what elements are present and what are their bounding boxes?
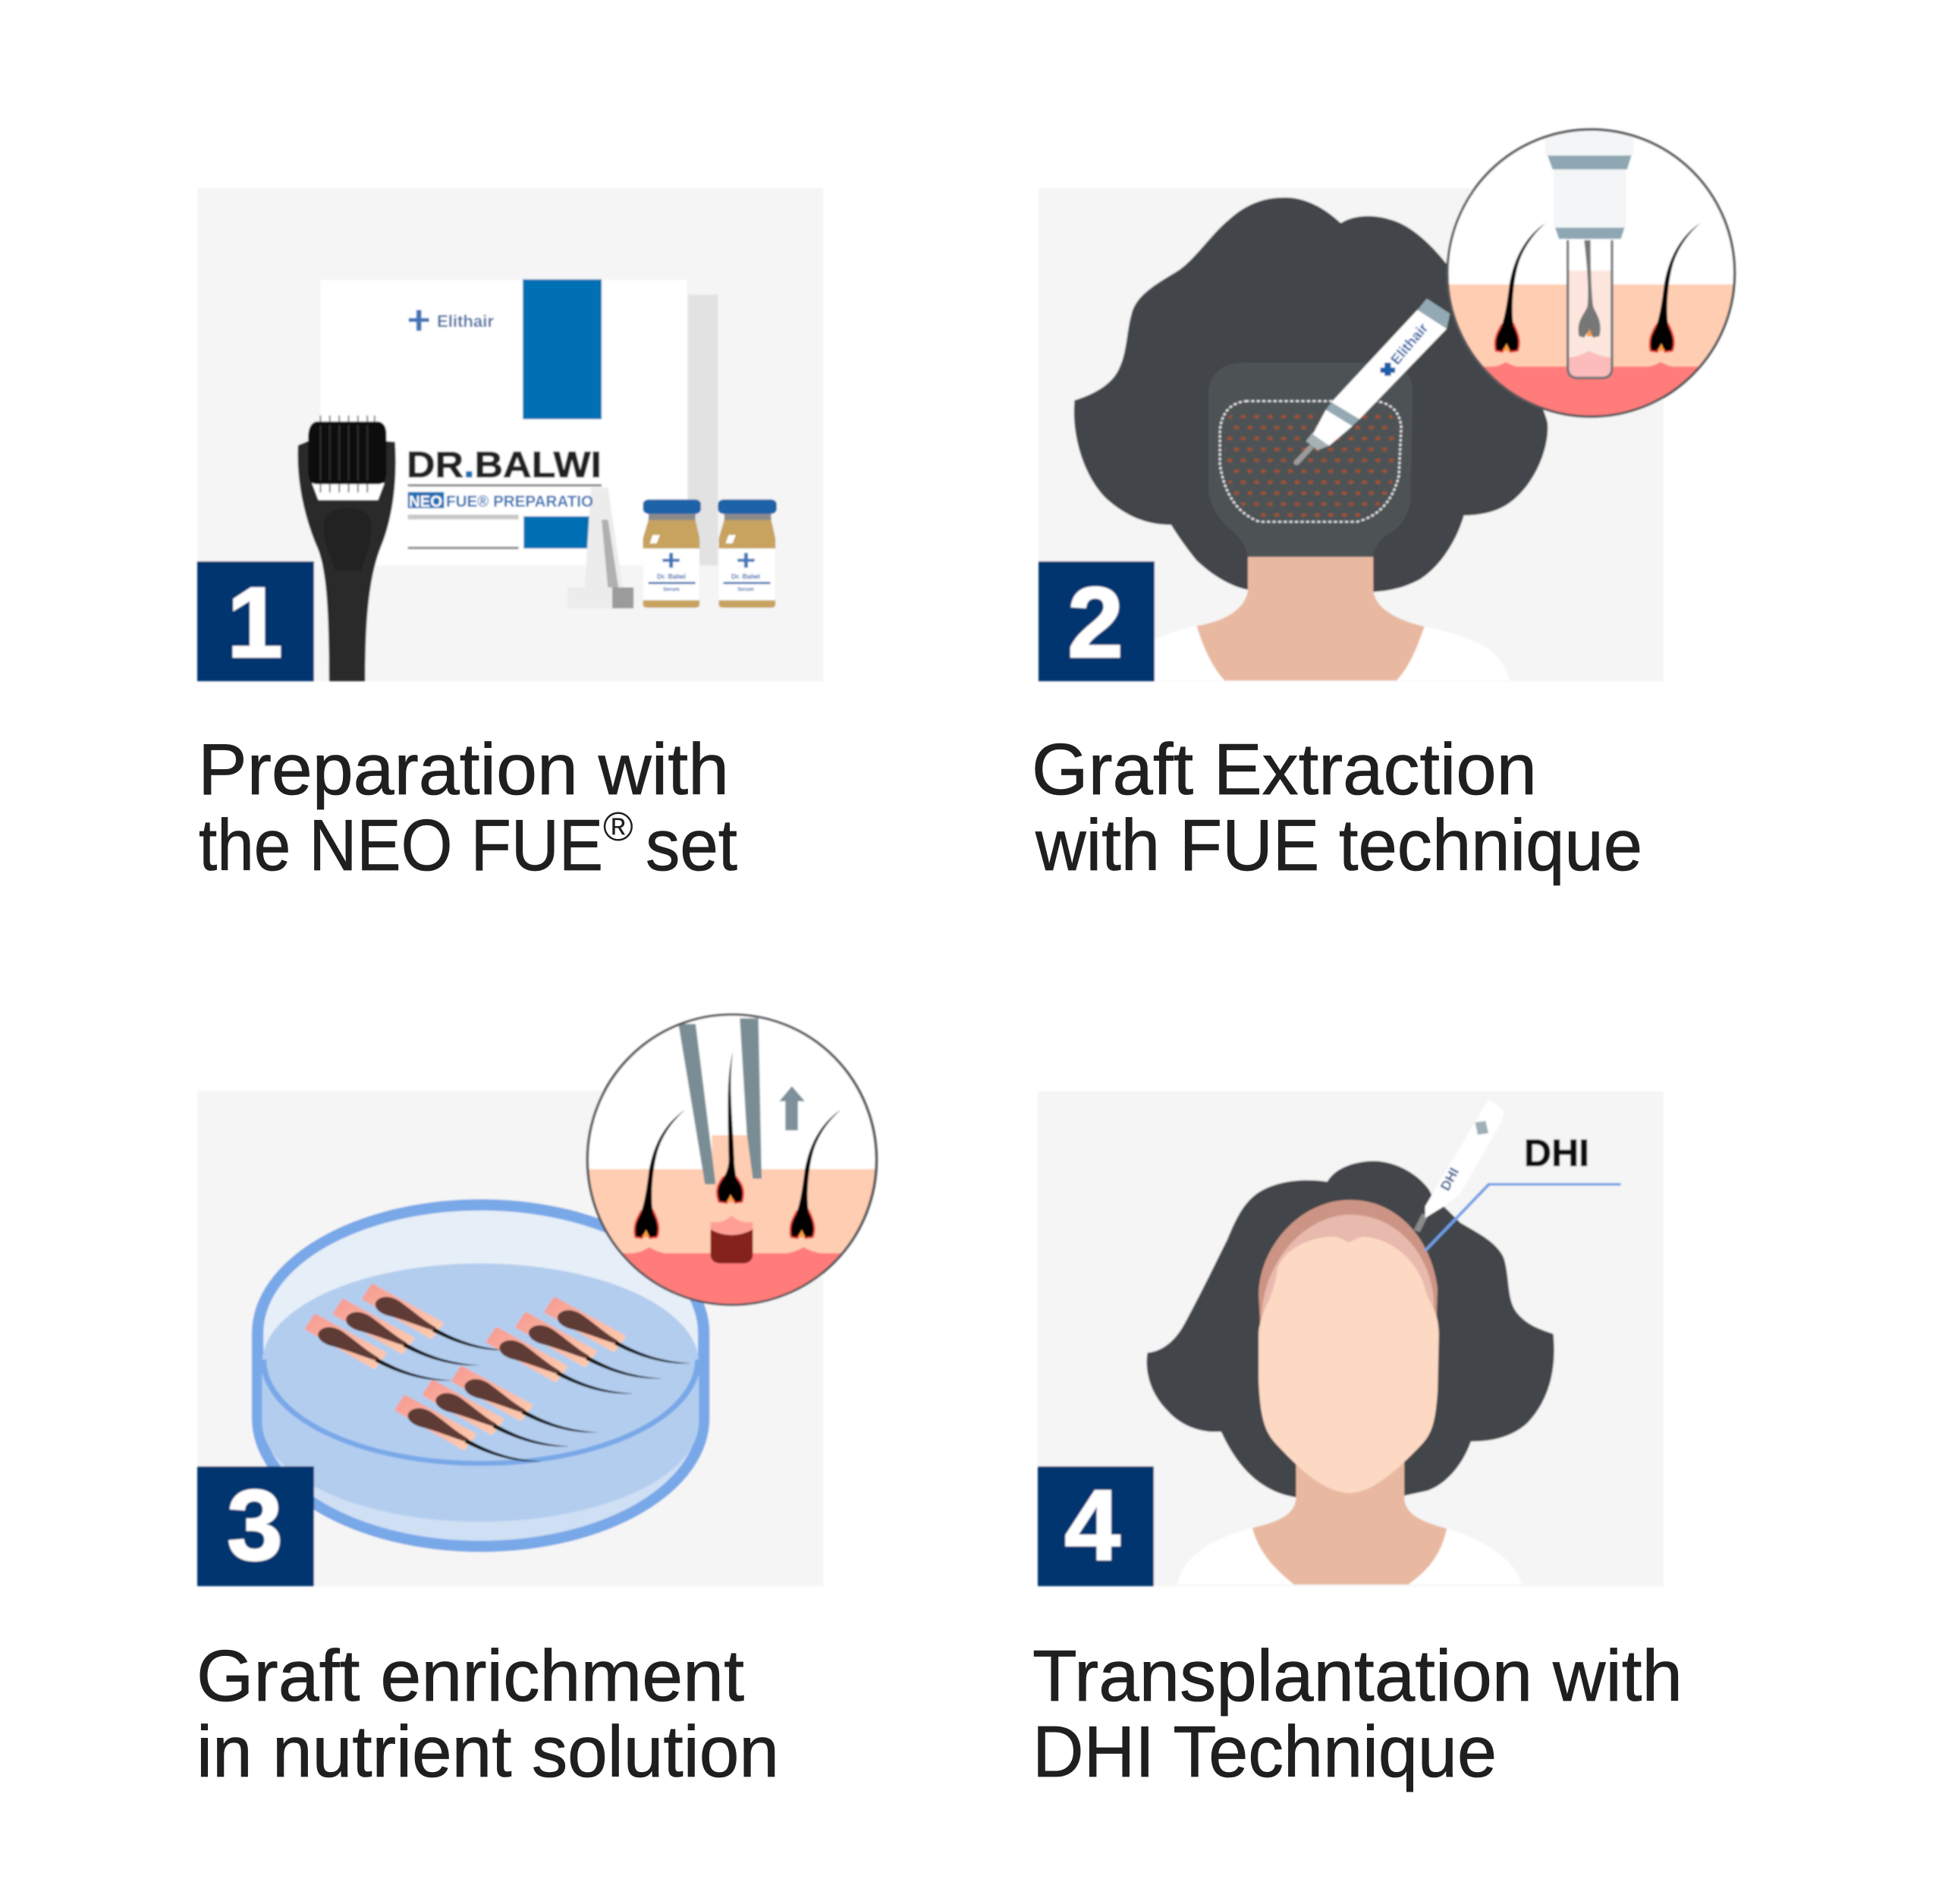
product box	[320, 279, 718, 565]
heading: step 4: Transplantation with	[1032, 1635, 1683, 1717]
vial label right	[731, 573, 760, 592]
shirt	[1155, 626, 1510, 680]
callout: FUE follicle close-up	[1441, 121, 1745, 425]
shaved donor area	[1208, 363, 1413, 557]
shirt	[1177, 1528, 1522, 1585]
heading: step 1: Preparation with	[198, 729, 729, 810]
callout ring	[1447, 130, 1735, 416]
box label: NEO: NEO	[409, 493, 442, 511]
hairline recipient area	[1259, 1200, 1438, 1348]
deep skin layer	[1484, 361, 1699, 417]
badge: number 3	[197, 1466, 314, 1586]
panel: step 3 graft enrichment	[197, 1009, 879, 1586]
heading: step 2: with FUE technique	[1035, 805, 1642, 886]
panel: step 1 preparation	[197, 188, 823, 681]
extraction dots	[1224, 408, 1397, 517]
icon: derma roller	[297, 416, 396, 681]
panel background	[197, 188, 823, 681]
white background of callout	[1447, 129, 1735, 285]
pen brand text: Elithair	[1388, 320, 1432, 368]
icon: serum vial left	[643, 499, 701, 608]
heading: step 1: ®	[603, 804, 633, 850]
logo text: Elithair: Elithair	[437, 312, 494, 331]
follicle hair right	[1650, 223, 1700, 352]
vial label left	[657, 573, 686, 592]
vial label right: Serum	[737, 587, 754, 592]
heading: step 1: set	[646, 805, 737, 886]
panel background	[197, 1091, 823, 1586]
heading: step 3: Graft enrichment	[196, 1635, 744, 1717]
badge: number 1: 1	[227, 567, 283, 678]
icon: extraction pen	[1296, 299, 1450, 463]
box label: FUE preparation: FUE® PREPARATIO	[446, 493, 593, 511]
label: DHI: DHI	[1524, 1132, 1589, 1174]
panel: step 2 graft extraction	[1039, 121, 1745, 681]
arrow up	[779, 1086, 805, 1130]
neck	[1197, 557, 1425, 680]
heading: step 4	[1032, 1635, 1683, 1792]
panel background	[1039, 188, 1664, 681]
follicle hair left	[634, 1110, 685, 1238]
pen brand text: DHI	[1438, 1165, 1462, 1193]
hairline lighter band	[1262, 1214, 1435, 1348]
box title: DR.BALWI: DR.BALWI	[407, 445, 602, 485]
dashed boundary	[1220, 401, 1401, 522]
tweezers	[678, 1018, 762, 1184]
heading: step 4: DHI Technique	[1032, 1711, 1497, 1792]
hair silhouette	[1074, 197, 1548, 592]
petri dish	[252, 1199, 709, 1552]
graft socket	[711, 1215, 753, 1264]
badge: number 1	[197, 561, 314, 681]
hair silhouette	[1147, 1161, 1554, 1497]
face	[1259, 1236, 1439, 1493]
extraction tube	[1568, 240, 1612, 378]
badge: number 4: 4	[1064, 1469, 1120, 1581]
icon: DHI pen	[1417, 1100, 1504, 1231]
follicle hair right	[790, 1110, 841, 1238]
badge: number 3: 3	[227, 1469, 283, 1581]
follicle hair left	[1495, 223, 1545, 352]
badge: number 2	[1039, 561, 1155, 681]
vial label left: Serum	[663, 587, 680, 592]
panel background	[1038, 1092, 1664, 1586]
heading: step 1	[198, 729, 737, 886]
punch device	[1545, 131, 1633, 239]
vial label right: Dr. Balwi	[731, 573, 760, 580]
vial label left: Dr. Balwi	[657, 573, 686, 580]
badge: number 2: 2	[1067, 567, 1123, 678]
badge: number 4	[1038, 1466, 1154, 1586]
grafts group	[307, 1286, 691, 1462]
neck	[1252, 1456, 1447, 1585]
callout ring	[587, 1014, 876, 1305]
callout: graft lifted by tweezers	[582, 1009, 879, 1311]
heading: step 3: in nutrient solution	[196, 1711, 779, 1792]
heading: step 2: Graft Extraction	[1032, 729, 1537, 810]
panel: step 4 transplantation	[1038, 1092, 1664, 1586]
lifted hair	[717, 1052, 743, 1203]
heading: step 1: the NEO FUE	[199, 805, 603, 886]
tool: punch tip	[567, 488, 633, 608]
icon: serum vial right	[718, 499, 777, 608]
skin layer	[1441, 284, 1745, 368]
callout line	[1425, 1184, 1621, 1251]
heading: step 2	[1032, 729, 1642, 886]
heading: step 3	[196, 1635, 779, 1792]
